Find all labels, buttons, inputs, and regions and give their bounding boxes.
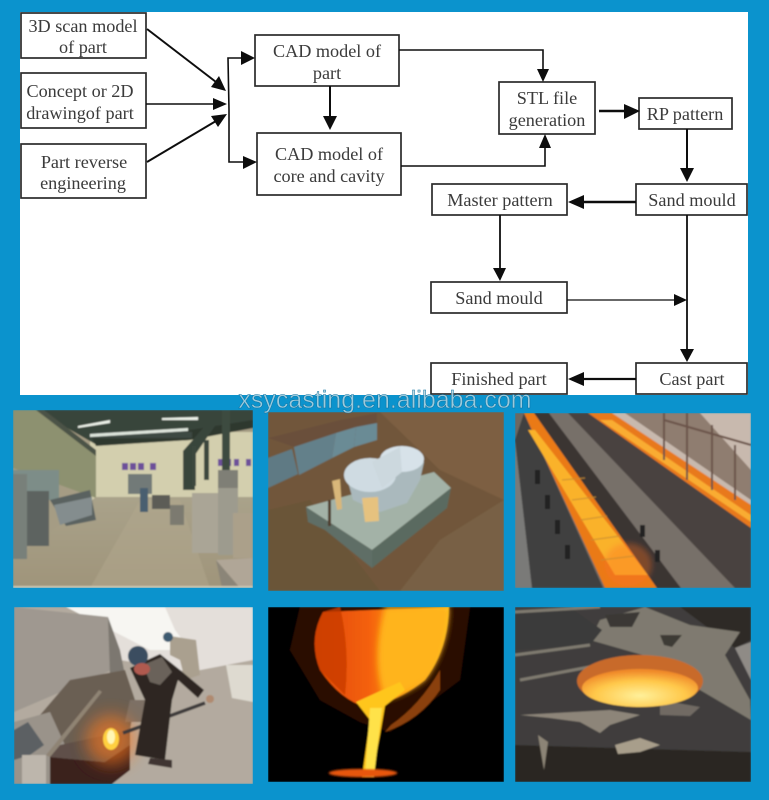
box: CAD model of core and cavity: core and cavity <box>273 166 385 186</box>
arrow: lower sand mould to main line <box>567 294 687 306</box>
arrow: concept to merge point <box>146 98 227 110</box>
photo: worker pouring molten metal <box>14 607 253 784</box>
box: sand mould upper <box>636 184 747 215</box>
box: STL file generation <box>499 82 595 134</box>
photo: molten metal in mould lines <box>515 413 751 588</box>
box: part reverse engineering: engineering <box>40 173 126 193</box>
arrow: merge point to CAD model of part <box>228 51 255 110</box>
box: RP pattern: RP pattern <box>647 104 723 124</box>
box: concept or 2D drawing of part: Concept or 2D <box>26 81 134 101</box>
box: finished part: Finished part <box>451 369 547 389</box>
box: CAD model of core and cavity <box>257 133 401 195</box>
arrow: cast part to finished part <box>568 372 636 386</box>
arrow: sand mould to master pattern <box>568 195 636 209</box>
panel: process flowchart <box>20 12 748 395</box>
box: RP pattern <box>639 98 732 129</box>
photo: furnace opening with molten metal <box>515 607 751 782</box>
box: CAD model of part: CAD model of <box>273 41 382 61</box>
box: CAD model of part: part <box>313 63 341 83</box>
box: sand mould lower <box>431 282 567 313</box>
arrow: CAD part to CAD core <box>323 86 337 130</box>
photo: casting pattern on sand mould <box>268 412 504 591</box>
photo: ladle pouring molten iron <box>268 607 504 782</box>
box: sand mould upper: Sand mould <box>648 190 736 210</box>
arrow: 3D scan to merge point <box>147 29 226 91</box>
box: master pattern <box>432 184 567 215</box>
box: STL file generation: STL file <box>517 88 577 108</box>
box: 3D scan model of part: 3D scan model <box>28 16 138 36</box>
photo: foundry workshop interior <box>13 410 253 588</box>
box: finished part <box>431 363 567 394</box>
arrow: CAD part to STL <box>399 50 549 82</box>
box: cast part: Cast part <box>659 369 725 389</box>
arrow: CAD core to STL <box>401 134 551 166</box>
arrow: merge point to CAD core and cavity <box>229 110 257 169</box>
box: part reverse engineering <box>21 144 146 198</box>
arrow: reverse engineering to merge point <box>147 114 227 162</box>
arrow: sand mould to cast part <box>680 215 694 362</box>
box: master pattern: Master pattern <box>447 190 553 210</box>
box: 3D scan model of part: of part <box>59 37 107 57</box>
box: CAD model of core and cavity: CAD model of <box>275 144 384 164</box>
box: STL file generation: generation <box>509 110 585 130</box>
box: cast part <box>636 363 747 394</box>
box: part reverse engineering: Part reverse <box>41 152 127 172</box>
box: sand mould lower: Sand mould <box>455 288 543 308</box>
arrow: STL to RP pattern <box>599 104 640 119</box>
arrow: master pattern to sand mould <box>493 215 506 281</box>
arrow: RP pattern to sand mould <box>680 129 694 182</box>
box: CAD model of part <box>255 35 399 86</box>
watermark: xsycasting.en.alibaba.com: xsycasting.en.alibaba.com <box>238 386 532 414</box>
box: 3D scan model of part <box>21 13 146 58</box>
box: concept or 2D drawing of part <box>21 73 146 128</box>
box: concept or 2D drawing of part: drawingof part <box>26 103 134 123</box>
